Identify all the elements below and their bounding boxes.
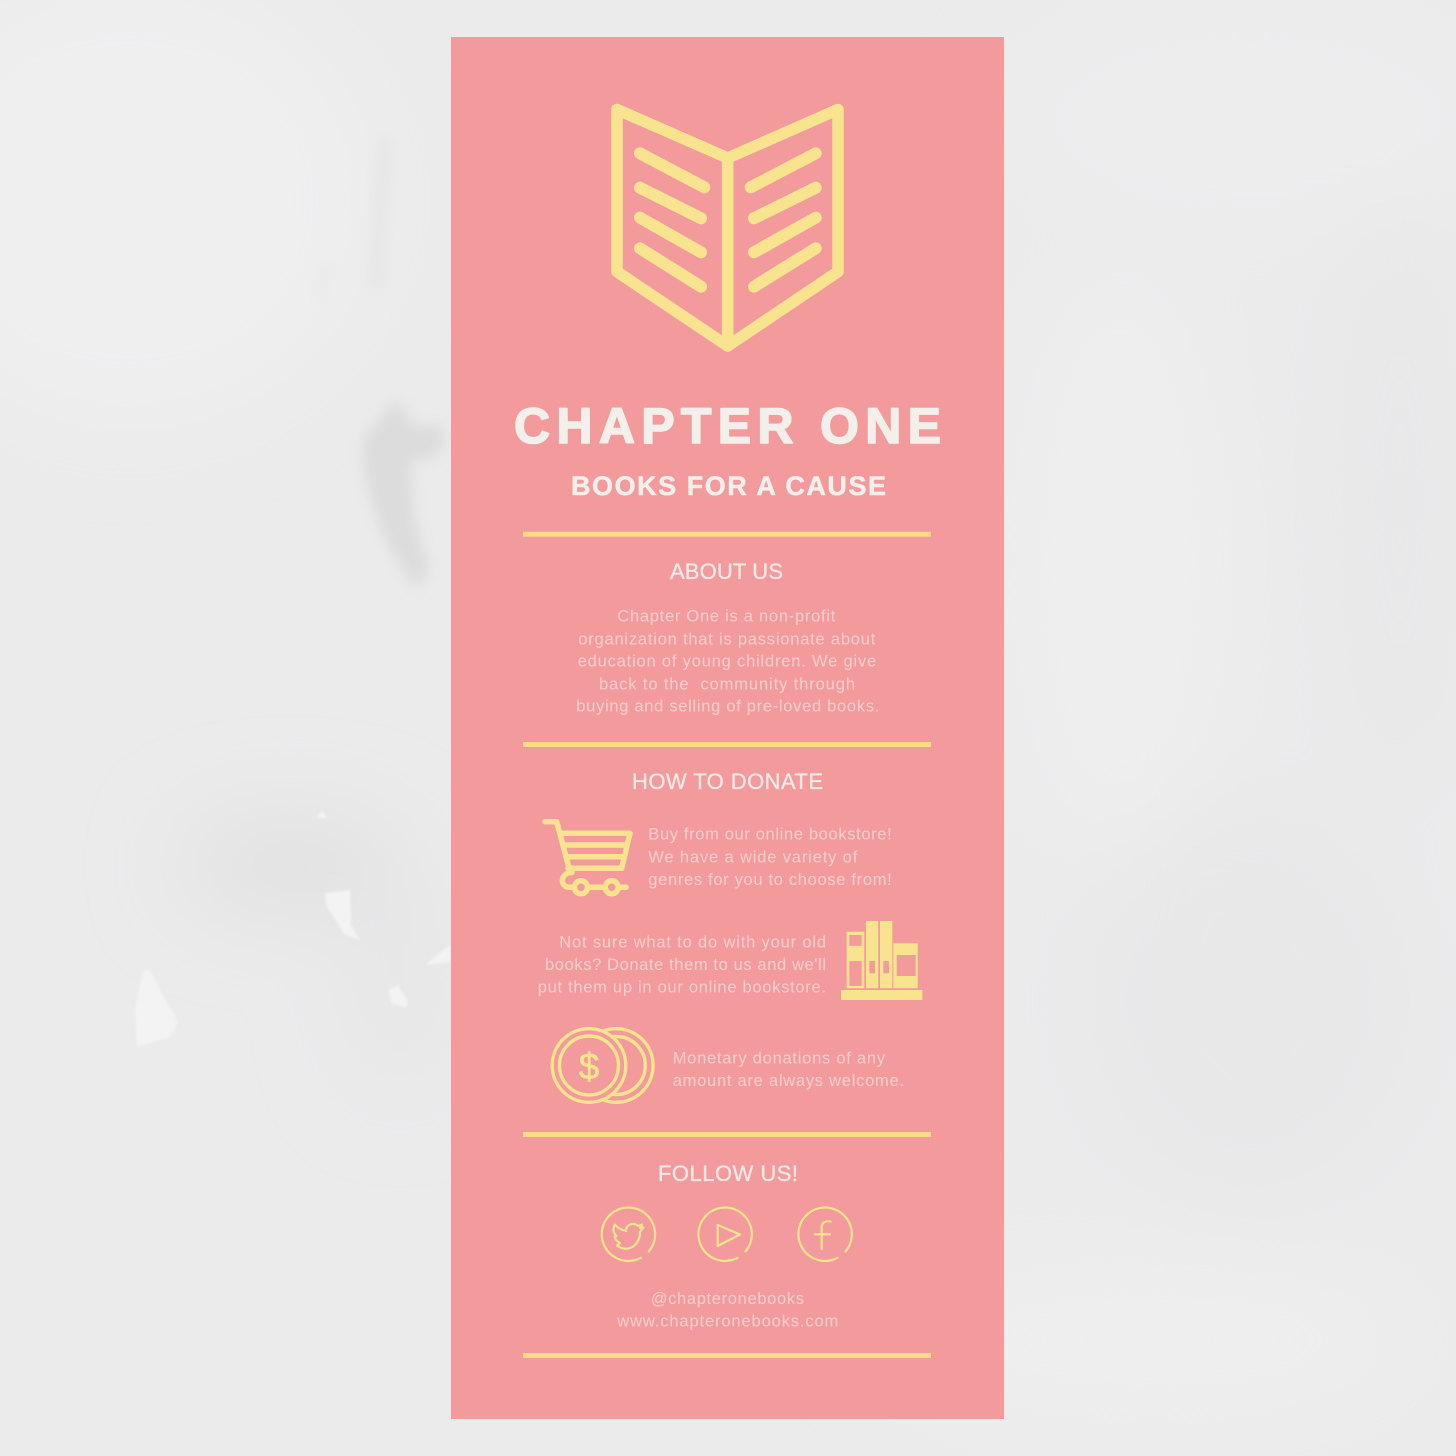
section: about us [576,559,879,716]
text block: about us [576,608,879,716]
divider: lower [523,1132,931,1137]
text block: buy [648,825,892,889]
icon: open book [617,110,838,346]
text block: monetary donations: amount are always welcome. [673,1072,904,1090]
panel: pink flyer [451,37,1004,1419]
divider: middle [523,742,931,747]
text block: social handle and website [616,1290,838,1331]
text block: buy: genres for you to choose from! [648,871,892,889]
text block: donate books: books? Donate them to us and we'll [545,956,826,974]
text block: monetary donations [673,1049,904,1090]
text block: donate books [538,933,826,997]
icon: books on shelf [841,921,922,1000]
subtitle: BOOKS FOR A CAUSE [571,471,886,501]
section: how to donate [538,769,922,1104]
heading: about us: ABOUT US [670,559,783,584]
icon: coins [550,1027,653,1104]
text block: buy: Buy from our online bookstore! [648,825,892,843]
text block: about us: Chapter One is a non-profit [617,608,836,626]
icon: play [698,1208,752,1261]
heading: follow us: FOLLOW US! [658,1161,798,1186]
heading: how to donate: HOW TO DONATE [632,769,823,794]
icon: facebook [798,1208,852,1261]
text block: social handle and website: www.chapteronebooks.com [616,1313,838,1331]
divider: top [523,532,931,537]
text block: social handle and website: @chapteronebooks [651,1290,804,1308]
text block: about us: education of young children. We give [578,653,876,671]
divider: bottom [523,1353,931,1358]
icon: shopping cart [545,822,630,894]
text block: about us: buying and selling of pre-loved books. [576,698,879,716]
text block: buy: We have a wide variety of [648,848,858,866]
text block: about us: back to the community through [599,675,855,693]
section: follow us [602,1161,852,1331]
title: CHAPTER ONE [514,398,941,454]
icon: twitter [602,1208,655,1261]
text block: about us: organization that is passionate about [578,630,876,648]
text block: monetary donations: Monetary donations of any [673,1049,886,1067]
text block: donate books: Not sure what to do with your old [559,933,826,951]
text block: donate books: put them up in our online bookstore. [538,979,826,997]
icon: coins: $ [579,1046,599,1087]
